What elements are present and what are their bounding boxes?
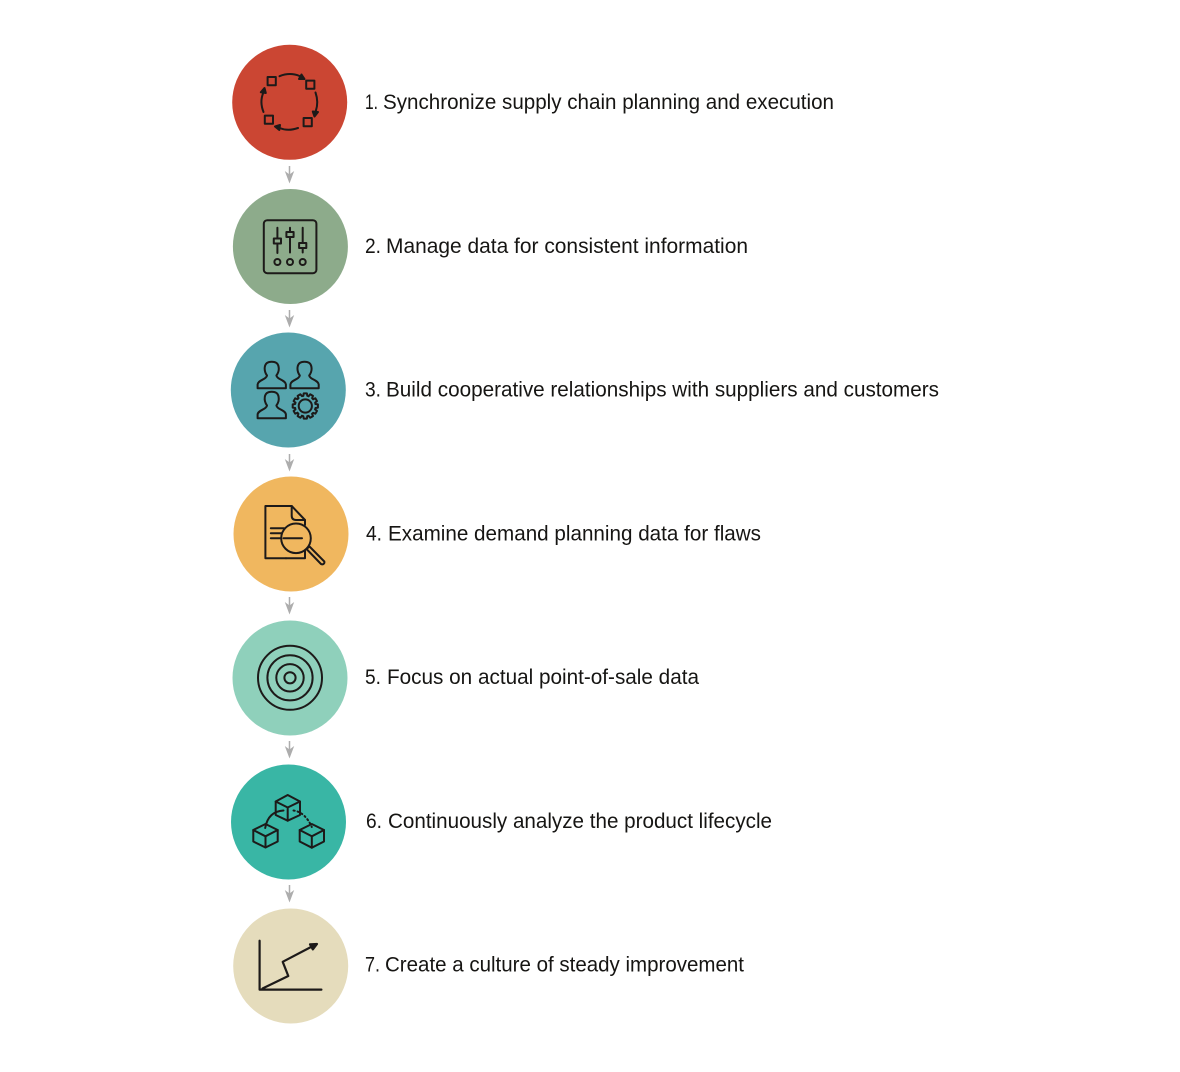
label: step 7: 7. (365, 954, 380, 976)
icon: circular sync of four squares (261, 74, 318, 130)
arrow: step 6 to 7 (285, 885, 294, 902)
step 7: culture of steady improvement (233, 908, 744, 1024)
arrow: step 4 to 5 (285, 597, 294, 614)
label: step 1: Synchronize supply chain planning and execution (383, 91, 834, 114)
step 6: analyze product lifecycle (231, 764, 772, 880)
label: step 5: 5. (365, 666, 381, 689)
label: step 4: Examine demand planning data for flaws (388, 522, 761, 546)
label: step 1: 1. (365, 91, 378, 114)
circle: step 4 background (234, 476, 348, 592)
circle: step 6 background (231, 764, 346, 880)
icon: control panel sliders (264, 220, 316, 273)
icon: concentric target (258, 646, 322, 710)
circle: step 5 background (232, 620, 348, 736)
circle: step 3 background (231, 332, 346, 448)
label: step 6: Continuously analyze the product lifecycle (388, 810, 772, 833)
icon: document with magnifying glass (265, 506, 324, 564)
icon: three people and a gear (258, 362, 319, 419)
step 1: synchronize planning and execution (232, 45, 834, 160)
icon: three connected cubes (253, 795, 324, 848)
step 4: examine demand planning data (234, 476, 761, 592)
circle: step 2 background (233, 189, 348, 304)
label: step 2: Manage data for consistent information (386, 235, 748, 258)
step 5: focus on point-of-sale data (232, 620, 699, 736)
label: step 3: Build cooperative relationships with suppliers and customers (386, 378, 939, 402)
arrow: step 2 to 3 (285, 310, 294, 328)
label: step 3: 3. (365, 378, 381, 402)
label: step 5: Focus on actual point-of-sale data (387, 666, 699, 689)
arrow: step 3 to 4 (285, 454, 294, 472)
step 2: manage data (233, 189, 748, 304)
label: step 7: Create a culture of steady improvement (385, 954, 744, 976)
label: step 2: 2. (365, 235, 381, 258)
arrow: step 1 to 2 (285, 166, 294, 184)
label: step 4: 4. (366, 522, 382, 546)
label: step 6: 6. (366, 810, 382, 833)
icon: rising line chart (260, 941, 321, 990)
circle: step 1 background (232, 45, 347, 160)
circle: step 7 background (233, 908, 348, 1024)
arrow: step 5 to 6 (285, 741, 294, 758)
step 3: cooperative relationships (231, 332, 939, 448)
